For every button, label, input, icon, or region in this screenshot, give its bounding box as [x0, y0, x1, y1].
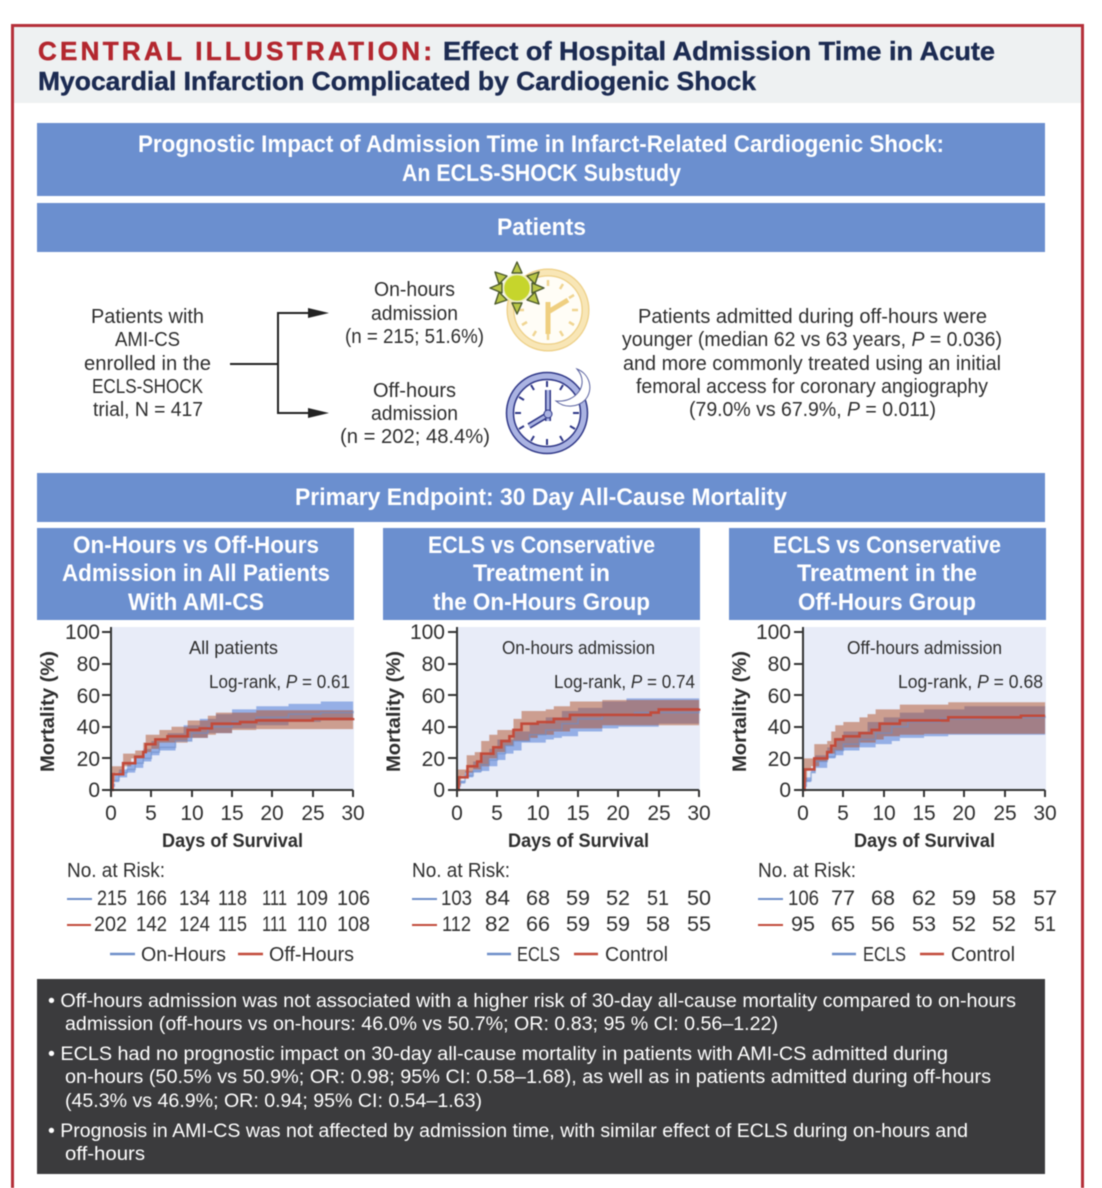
chart: all patients: 0	[88, 779, 100, 802]
heading: on-hours column: Treatment in	[473, 560, 610, 587]
table: numbers at risk, all patients: 124	[179, 913, 210, 936]
table: numbers at risk, off-hours: 58	[992, 887, 1016, 910]
table: numbers at risk, all patients: 142	[136, 913, 167, 936]
chart: off-hours admission: 0	[797, 802, 809, 825]
text: patient characteristics: femoral access for coronary angiography	[636, 376, 988, 398]
table: numbers at risk, off-hours: 95	[791, 913, 815, 936]
text: enrolled patients: enrolled in the	[84, 353, 211, 375]
panel: key findings: off-hours	[65, 1144, 145, 1165]
chart: all patients: Days of Survival	[162, 831, 303, 852]
chart: off-hours admission: 30	[1033, 802, 1057, 825]
chart: on-hours admission: 0	[451, 802, 463, 825]
chart: on-hours admission: 5	[491, 802, 503, 825]
table: numbers at risk, all patients: 115	[218, 913, 247, 936]
table: numbers at risk, off-hours: 51	[1034, 913, 1056, 936]
chart: all patients: 40	[77, 716, 100, 739]
chart: on-hours admission: 0	[433, 779, 445, 802]
heading: on-hours column	[383, 528, 700, 620]
chart: all patients: Log-rank, P = 0.61	[209, 672, 350, 692]
chart: all patients	[38, 621, 365, 852]
chart: on-hours admission: 40	[422, 716, 445, 739]
title: CENTRAL ILLUSTRATION:	[38, 36, 432, 66]
legend: off-hours: ECLS	[863, 944, 906, 966]
chart: on-hours admission: 15	[566, 802, 590, 825]
chart: off-hours admission: Days of Survival	[854, 831, 995, 852]
table: numbers at risk, off-hours: 59	[952, 887, 976, 910]
table: numbers at risk, all patients: No. at Risk:	[67, 860, 165, 882]
chart: all patients: 100	[65, 621, 100, 644]
chart: all patients: 30	[341, 802, 365, 825]
table: numbers at risk, on-hours: 51	[647, 887, 669, 910]
chart: off-hours admission: 25	[993, 802, 1017, 825]
table: numbers at risk, all patients: 202	[94, 913, 127, 936]
heading: study banner: An ECLS-SHOCK Substudy	[402, 160, 682, 187]
chart: off-hours admission: 5	[837, 802, 849, 825]
table: numbers at risk, all patients: 108	[337, 913, 370, 936]
table: numbers at risk, off-hours: 52	[952, 913, 976, 936]
title	[14, 27, 1081, 103]
heading: all patients column: Admission in All Patients	[62, 560, 330, 587]
text: on-hours admission: admission	[371, 303, 458, 325]
text: enrolled patients: trial, N = 417	[93, 399, 203, 421]
chart: all patients: 5	[145, 802, 157, 825]
table: numbers at risk, on-hours	[412, 860, 711, 936]
chart: off-hours admission: 40	[768, 716, 791, 739]
arrow: patient split	[230, 308, 329, 418]
heading: all patients column	[37, 528, 354, 620]
chart: all patients: 15	[220, 802, 244, 825]
legend: all patients	[110, 944, 354, 966]
heading: all patients column: With AMI-CS	[128, 589, 264, 616]
text: patient characteristics: (79.0% vs 67.9%, P = 0.011)	[689, 399, 936, 421]
text: enrolled patients: ECLS-SHOCK	[92, 376, 204, 398]
heading: off-hours column: Off-Hours Group	[798, 589, 976, 616]
table: numbers at risk, off-hours: 62	[912, 887, 936, 910]
chart: all patients: 0	[105, 802, 117, 825]
chart: off-hours admission: 10	[872, 802, 896, 825]
heading: study banner	[37, 123, 1045, 196]
chart: off-hours admission: 0	[779, 779, 791, 802]
panel: key findings: on-hours (50.5% vs 50.9%; OR: 0.98; 95% CI: 0.58–1.68), as well as in patients admitted during off-hours	[65, 1067, 991, 1088]
table: numbers at risk, on-hours: 55	[687, 913, 711, 936]
table: numbers at risk, off-hours: 106	[788, 887, 819, 910]
table: numbers at risk, off-hours: 57	[1033, 887, 1057, 910]
panel: key findings	[37, 979, 1045, 1174]
table: numbers at risk, all patients: 111	[262, 887, 287, 910]
table: numbers at risk, on-hours: 50	[687, 887, 711, 910]
chart: off-hours admission: Log-rank, P = 0.68	[898, 672, 1043, 692]
legend: off-hours: Control	[951, 944, 1015, 966]
chart: on-hours admission: 10	[526, 802, 550, 825]
chart: on-hours admission: 25	[647, 802, 671, 825]
chart: all patients: 20	[260, 802, 284, 825]
table: numbers at risk, all patients: 106	[337, 887, 370, 910]
table: numbers at risk, on-hours: 52	[606, 887, 630, 910]
legend: on-hours: ECLS	[517, 944, 560, 966]
chart: all patients: Mortality (%)	[38, 651, 59, 772]
table: numbers at risk, on-hours: 66	[526, 913, 550, 936]
chart: off-hours admission: 80	[768, 653, 791, 676]
heading: on-hours column: the On-Hours Group	[433, 589, 650, 616]
table: numbers at risk, all patients: 109	[296, 887, 328, 910]
text: patient characteristics: and more commonly treated using an initial	[623, 353, 1001, 375]
table: numbers at risk, on-hours: 59	[566, 913, 590, 936]
text: off-hours admission: admission	[371, 403, 458, 425]
table: numbers at risk, all patients: 134	[179, 887, 210, 910]
chart: off-hours admission	[730, 621, 1057, 852]
heading: primary endpoint	[37, 473, 1045, 522]
table: numbers at risk, off-hours: 77	[831, 887, 855, 910]
text: enrolled patients: AMI-CS	[115, 329, 180, 351]
table: numbers at risk, all patients	[67, 860, 370, 936]
heading: off-hours column	[729, 528, 1046, 620]
icon: sun clock	[490, 262, 586, 348]
chart: all patients: All patients	[189, 638, 278, 658]
table: numbers at risk, off-hours: 68	[871, 887, 895, 910]
table: numbers at risk, off-hours	[758, 860, 1057, 936]
heading: patients	[37, 203, 1045, 252]
table: numbers at risk, on-hours: 59	[566, 887, 590, 910]
heading: primary endpoint: Primary Endpoint: 30 Day All-Cause Mortality	[295, 484, 788, 511]
chart: all patients: 25	[301, 802, 325, 825]
chart: off-hours admission: Mortality (%)	[730, 651, 751, 772]
table: numbers at risk, on-hours: 68	[526, 887, 550, 910]
title: Effect of Hospital Admission Time in Acute	[443, 36, 995, 66]
text: on-hours admission: On-hours	[374, 279, 455, 301]
table: numbers at risk, all patients: 110	[297, 913, 327, 936]
table: numbers at risk, all patients: 215	[97, 887, 127, 910]
table: numbers at risk, off-hours: No. at Risk:	[758, 860, 856, 882]
table: numbers at risk, on-hours: 112	[442, 913, 471, 936]
table: numbers at risk, off-hours: 52	[992, 913, 1016, 936]
legend: all patients: On-Hours	[141, 944, 226, 966]
table: numbers at risk, on-hours: 58	[646, 913, 670, 936]
chart: off-hours admission: 100	[756, 621, 791, 644]
legend: all patients: Off-Hours	[269, 944, 354, 966]
chart: on-hours admission: On-hours admission	[502, 638, 655, 658]
table: numbers at risk, all patients: 166	[136, 887, 167, 910]
text: enrolled patients	[84, 306, 211, 421]
table: numbers at risk, on-hours: 103	[441, 887, 472, 910]
chart: on-hours admission: 20	[422, 748, 445, 771]
chart: on-hours admission: Days of Survival	[508, 831, 649, 852]
text: off-hours admission: Off-hours	[373, 380, 456, 402]
text: on-hours admission	[345, 279, 484, 348]
text: off-hours admission	[340, 380, 490, 448]
chart: on-hours admission: 60	[422, 685, 445, 708]
table: numbers at risk, on-hours: No. at Risk:	[412, 860, 510, 882]
title: Myocardial Infarction Complicated by Cardiogenic Shock	[38, 66, 757, 96]
text: patient characteristics: younger (median 62 vs 63 years, P = 0.036)	[622, 329, 1002, 351]
panel: key findings: admission (off-hours vs on-hours: 46.0% vs 50.7%; OR: 0.83; 95 % CI: 0.56–1.22)	[65, 1014, 778, 1035]
chart: off-hours admission: Off-hours admission	[847, 638, 1002, 658]
heading: off-hours column: Treatment in the	[797, 560, 977, 587]
heading: study banner: Prognostic Impact of Admission Time in Infarct-Related Cardiogenic Shock:	[138, 131, 944, 158]
chart: off-hours admission: 20	[952, 802, 976, 825]
chart: on-hours admission	[384, 621, 711, 852]
chart: on-hours admission: 100	[410, 621, 445, 644]
text: off-hours admission: (n = 202; 48.4%)	[340, 426, 490, 448]
chart: all patients: 10	[180, 802, 204, 825]
table: numbers at risk, on-hours: 59	[606, 913, 630, 936]
legend: on-hours	[487, 944, 668, 966]
table: numbers at risk, off-hours: 56	[871, 913, 895, 936]
table: numbers at risk, off-hours: 65	[831, 913, 855, 936]
chart: on-hours admission: Log-rank, P = 0.74	[554, 672, 695, 692]
panel: key findings: • ECLS had no prognostic impact on 30-day all-cause mortality in patients with AMI-CS admitted during	[48, 1044, 948, 1065]
chart: all patients: 60	[77, 685, 100, 708]
panel: key findings: (45.3% vs 46.9%; OR: 0.94; 95% CI: 0.54–1.63)	[65, 1091, 482, 1112]
legend: on-hours: Control	[605, 944, 668, 966]
panel: key findings: • Off-hours admission was not associated with a higher risk of 30-day all-cause mortality compared to on-hours	[48, 991, 1016, 1012]
chart: all patients: 20	[77, 748, 100, 771]
heading: off-hours column: ECLS vs Conservative	[773, 532, 1001, 559]
table: numbers at risk, on-hours: 82	[485, 913, 510, 936]
chart: on-hours admission: 30	[687, 802, 711, 825]
text: on-hours admission: (n = 215; 51.6%)	[345, 326, 484, 348]
legend: off-hours	[832, 944, 1015, 966]
chart: on-hours admission: Mortality (%)	[384, 651, 405, 772]
chart: all patients: 80	[77, 653, 100, 676]
text: enrolled patients: Patients with	[91, 306, 204, 328]
heading: all patients column: On-Hours vs Off-Hours	[73, 532, 319, 559]
table: numbers at risk, off-hours: 53	[912, 913, 936, 936]
chart: off-hours admission: 60	[768, 685, 791, 708]
panel: key findings: • Prognosis in AMI-CS was not affected by admission time, with similar effect of ECLS during on-hours and	[48, 1121, 968, 1142]
icon: moon clock	[510, 369, 590, 450]
table: numbers at risk, all patients: 111	[262, 913, 287, 936]
chart: on-hours admission: 20	[606, 802, 630, 825]
heading: on-hours column: ECLS vs Conservative	[428, 532, 655, 559]
table: numbers at risk, on-hours: 84	[485, 887, 510, 910]
chart: on-hours admission: 80	[422, 653, 445, 676]
text: patient characteristics	[622, 306, 1002, 421]
chart: off-hours admission: 20	[768, 748, 791, 771]
table: numbers at risk, all patients: 118	[218, 887, 247, 910]
chart: off-hours admission: 15	[912, 802, 936, 825]
text: patient characteristics: Patients admitted during off-hours were	[638, 306, 987, 328]
heading: patients: Patients	[497, 214, 586, 241]
